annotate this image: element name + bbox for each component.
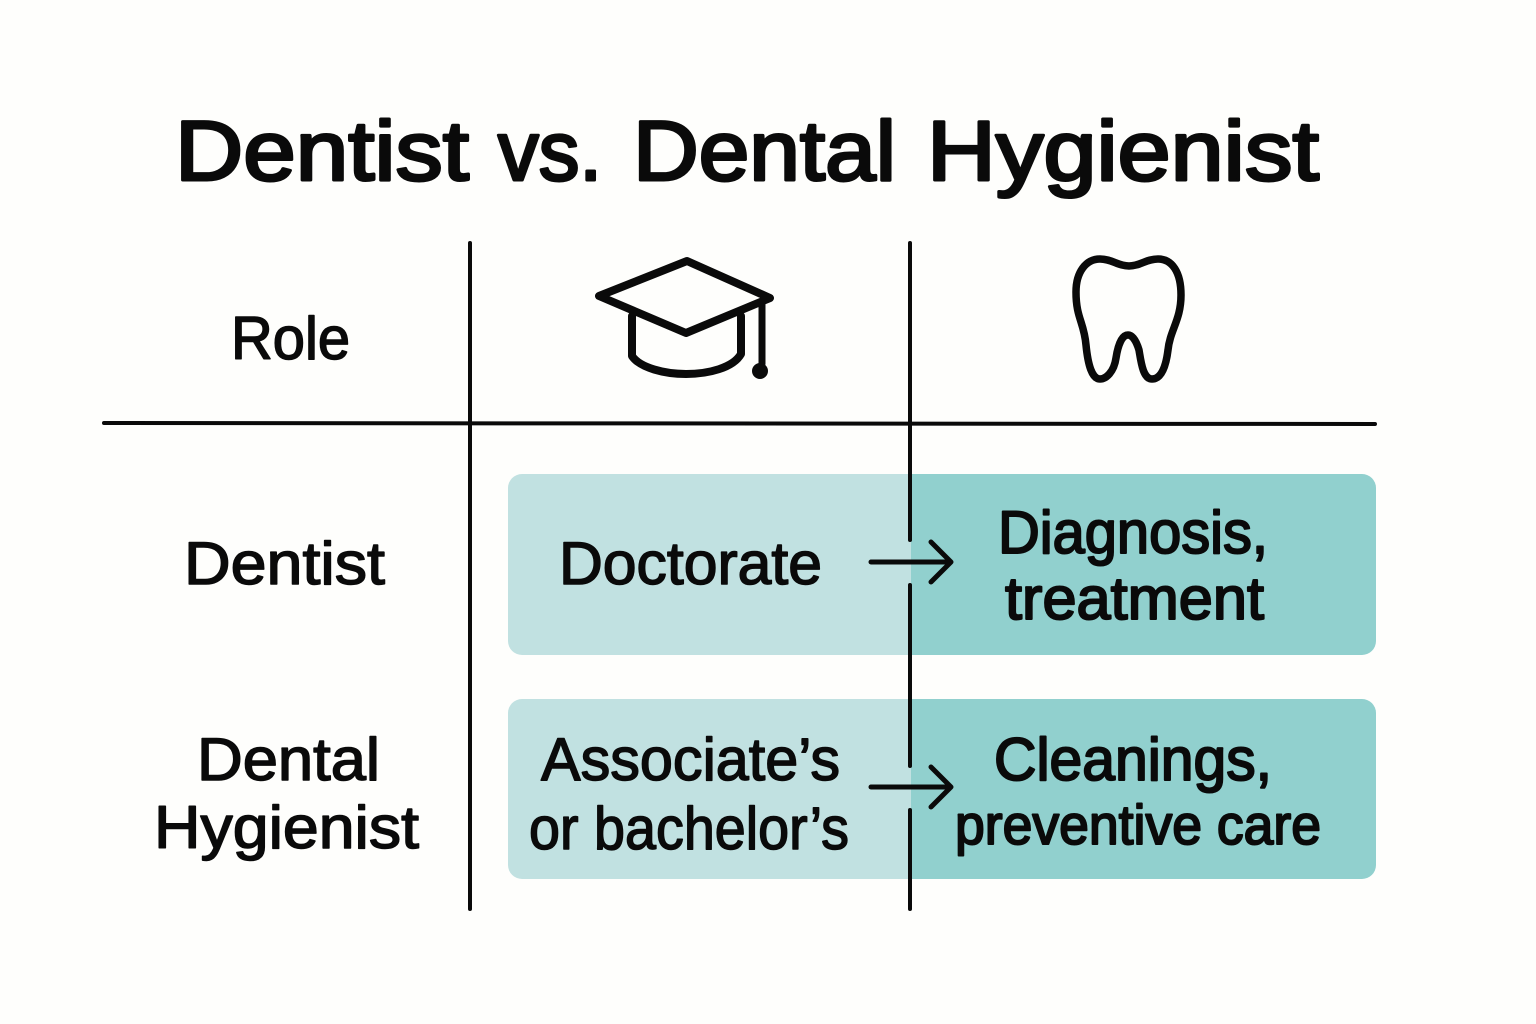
title: Hygienist <box>927 104 1319 198</box>
panel: hygienist education cell <box>508 699 911 879</box>
text: doctorate: Doctorate <box>559 530 822 597</box>
text: associate's or bachelor's: Associate’s <box>541 726 840 793</box>
row label: dental hygienist: Dental <box>197 726 380 793</box>
title: Dentist <box>175 104 469 198</box>
row label: dental hygienist: Hygienist <box>154 794 419 861</box>
title: vs. <box>498 104 602 198</box>
title <box>175 104 1319 198</box>
text: diagnosis, treatment: Diagnosis, <box>998 499 1268 566</box>
panel: dentist duties cell <box>911 474 1376 655</box>
text: diagnosis, treatment <box>998 499 1268 632</box>
panel: hygienist duties cell <box>911 699 1376 879</box>
arrow: associate's to cleanings <box>871 767 951 807</box>
icon: tooth <box>1076 259 1181 379</box>
text: diagnosis, treatment: treatment <box>1005 565 1264 632</box>
title: Dental <box>633 104 896 198</box>
text: cleanings, preventive care: preventive care <box>955 793 1321 856</box>
text: associate's or bachelor's <box>529 726 849 862</box>
panel: dentist education cell <box>508 474 911 655</box>
row label: dental hygienist <box>154 726 419 861</box>
text: associate's or bachelor's: or bachelor’s <box>529 795 849 862</box>
text: cleanings, preventive care: Cleanings, <box>994 726 1272 793</box>
row label: role: Role <box>231 305 350 372</box>
icon: graduation cap <box>599 261 770 376</box>
text: cleanings, preventive care <box>955 726 1321 856</box>
arrow: doctorate to diagnosis <box>871 542 951 582</box>
row label: dentist: Dentist <box>184 530 385 597</box>
